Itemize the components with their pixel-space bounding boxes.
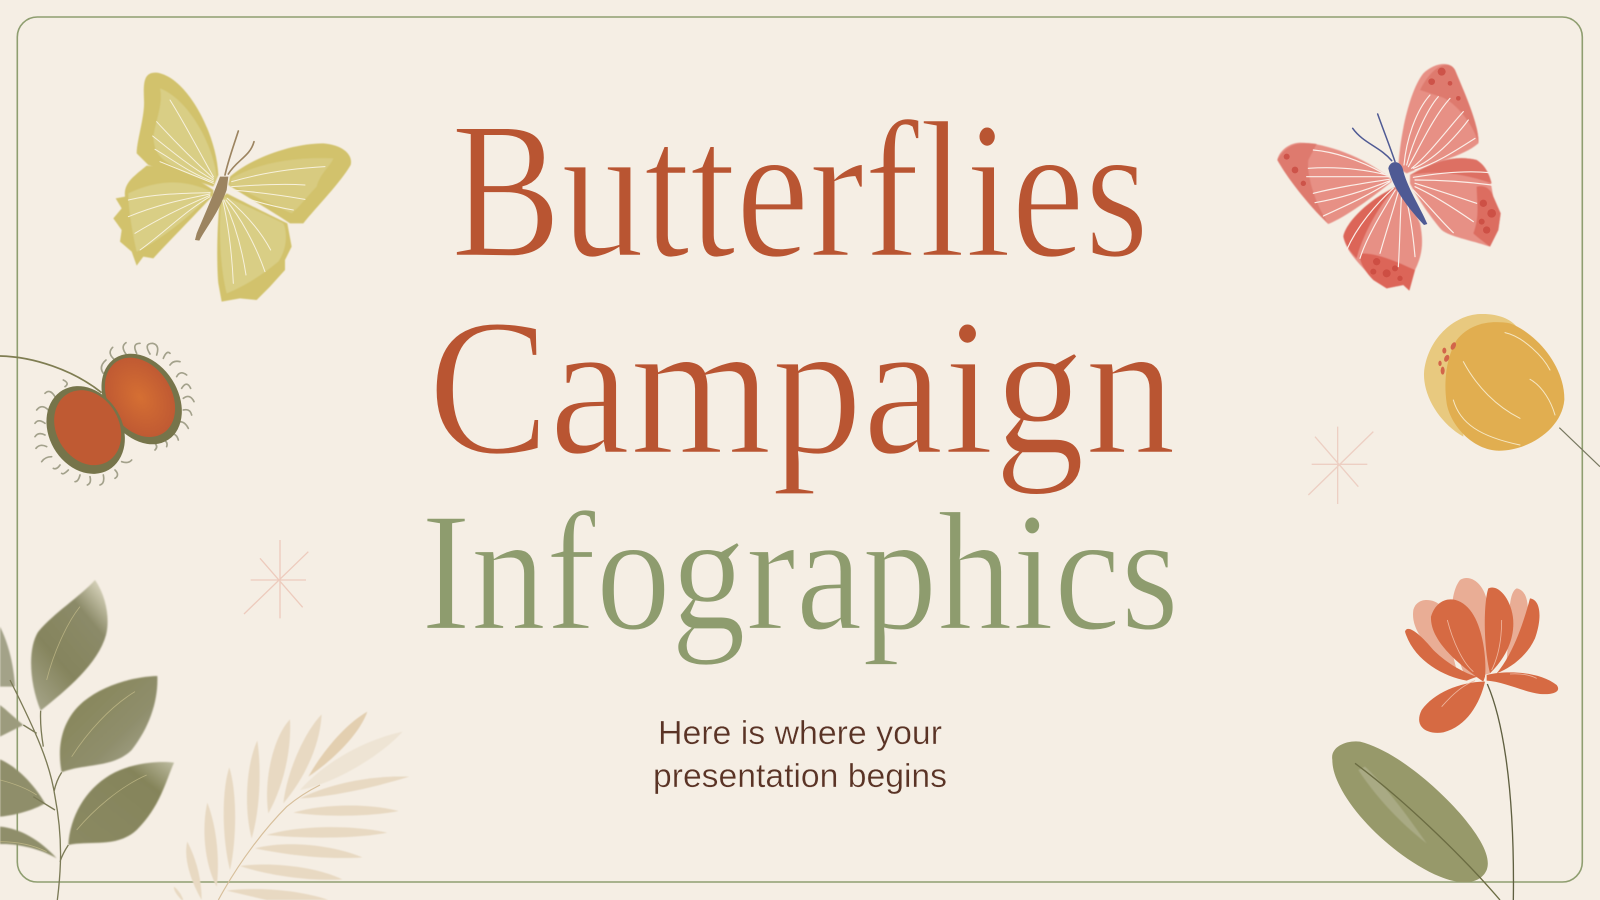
- icon: beige palm frond: [174, 712, 409, 900]
- title: Butterflies: [451, 82, 1149, 299]
- subtitle: Here is where your: [658, 714, 942, 751]
- title: Infographics: [421, 478, 1179, 666]
- icon: orange flower with leaf: [1332, 578, 1558, 900]
- title: [421, 82, 1179, 666]
- icon: red butterfly: [1277, 64, 1501, 291]
- icon: sparkle left: [244, 540, 308, 618]
- icon: sparkle right: [1308, 427, 1373, 504]
- subtitle: [653, 714, 947, 794]
- icon: olive leaf branch: [0, 580, 174, 900]
- title: Campaign: [428, 279, 1176, 496]
- icon: yellow apricot: [1424, 314, 1600, 467]
- icon: yellow butterfly: [113, 73, 351, 302]
- subtitle: presentation begins: [653, 757, 947, 794]
- icon: flytrap plant: [0, 339, 198, 488]
